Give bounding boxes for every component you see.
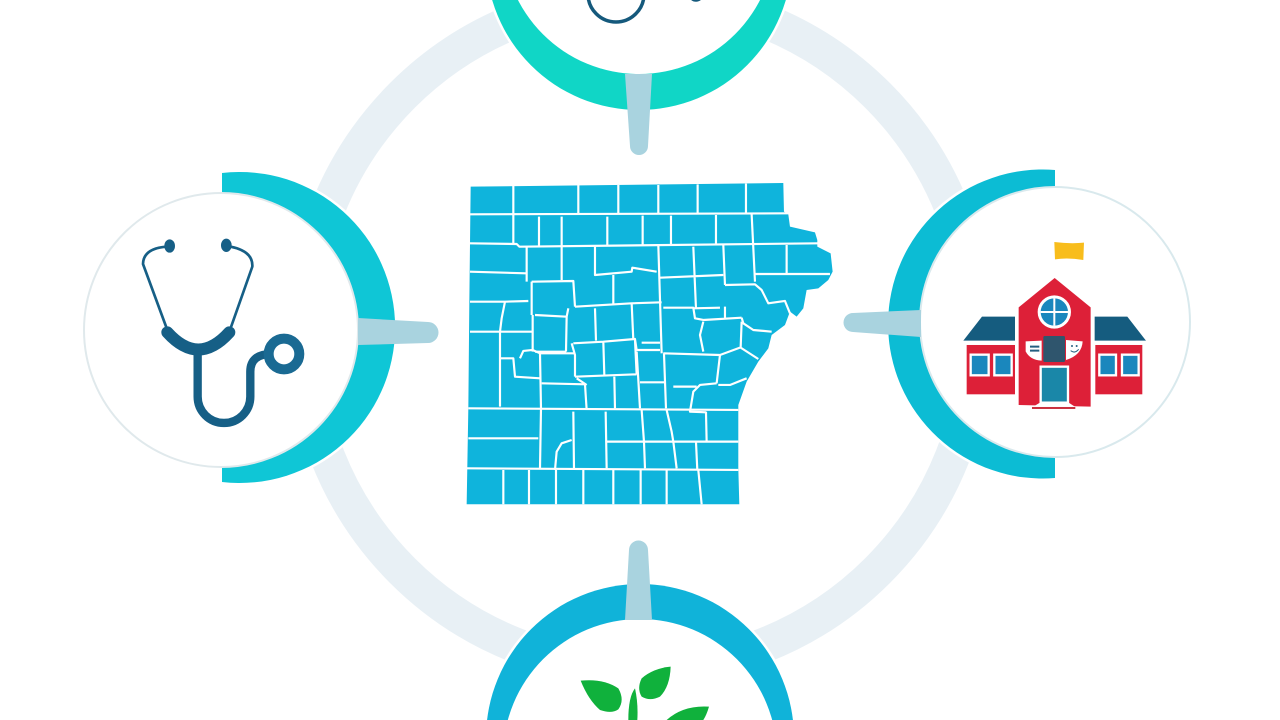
main gable <box>1019 278 1091 407</box>
hub: left health <box>84 172 438 483</box>
left wing <box>963 317 1015 341</box>
right white circle <box>920 187 1190 457</box>
county map <box>467 183 833 504</box>
top connector <box>625 74 652 155</box>
county boundaries <box>467 184 830 504</box>
left teal arc <box>222 172 395 483</box>
hub: bottom agriculture <box>486 540 794 720</box>
right wing <box>1095 317 1146 341</box>
icon: school building <box>963 242 1146 409</box>
map silhouette <box>467 183 833 504</box>
top white circle <box>503 0 775 74</box>
flag <box>1054 242 1084 260</box>
top teal arc <box>486 0 792 110</box>
icon: green plant <box>581 667 709 720</box>
left white circle <box>84 193 358 467</box>
bottom connector <box>625 540 652 620</box>
large connecting ring <box>304 0 976 669</box>
icon: stethoscope tubing, cropped <box>588 0 702 22</box>
icon: stethoscope <box>143 239 299 423</box>
left connector <box>358 318 438 345</box>
hub: top <box>486 0 792 155</box>
bottom blue arc <box>486 584 794 720</box>
bottom white circle <box>503 619 777 720</box>
right connector <box>844 310 921 337</box>
right teal arc <box>888 170 1055 478</box>
hub: right school <box>844 170 1190 478</box>
